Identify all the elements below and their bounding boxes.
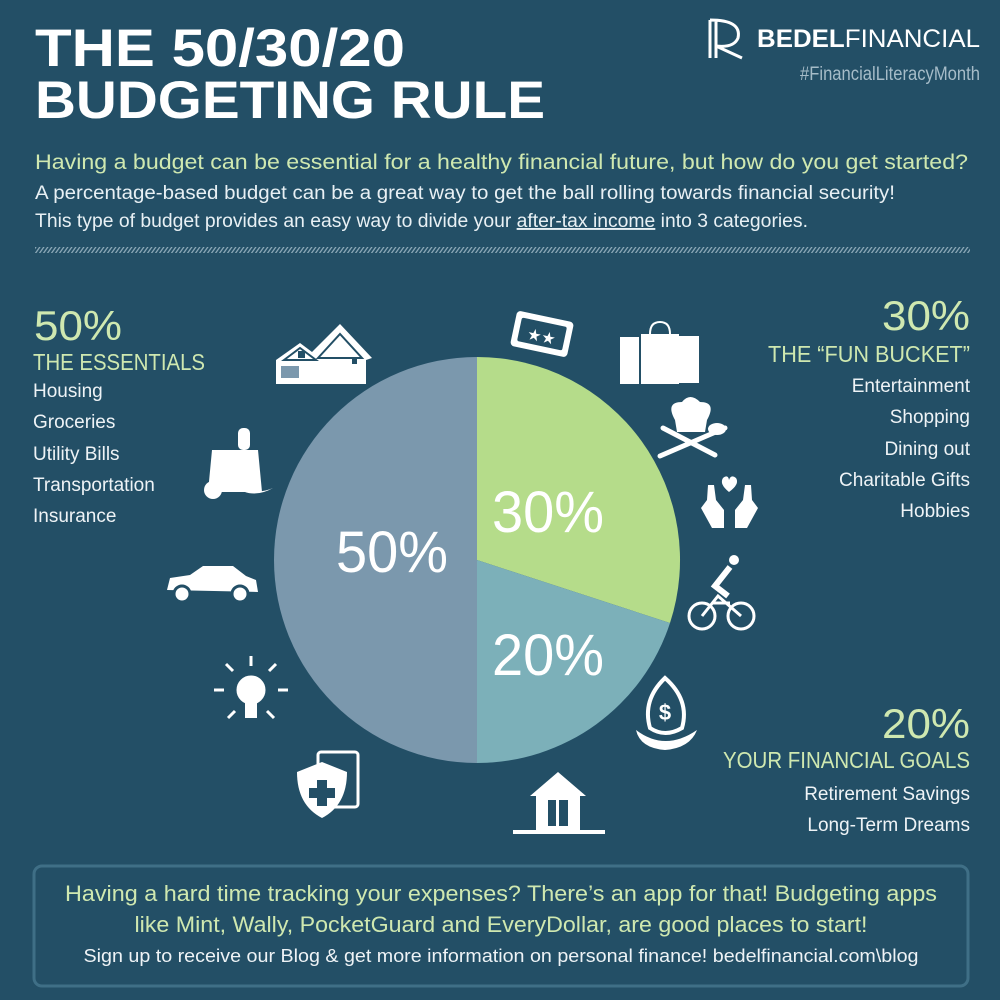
panel: fun bucket: Hobbies [900, 501, 970, 522]
panel: essentials: Utility Bills [33, 444, 120, 465]
panel: essentials [33, 302, 205, 527]
panel: fun bucket: Charitable Gifts [839, 470, 970, 491]
icon: beach house [513, 772, 605, 834]
panel: essentials: Insurance [33, 506, 116, 527]
logo: BEDELFINANCIAL [757, 25, 980, 53]
icon: house [276, 324, 372, 384]
icon: light bulb [214, 656, 288, 718]
panel: essentials: Transportation [33, 475, 155, 496]
icon: chef hat and utensils [660, 397, 726, 456]
icon: bicycle [689, 555, 754, 629]
callout: apps box: like Mint, Wally, PocketGuard and EveryDollar, are good places to start! [134, 912, 868, 937]
panel: fun bucket [768, 292, 971, 522]
panel: fun bucket: Shopping [890, 407, 970, 428]
title: THE 50/30/20 [35, 19, 405, 78]
icon: groceries [204, 428, 273, 499]
panel: essentials: 50% [34, 302, 122, 349]
panel: financial goals [723, 700, 970, 836]
panel: fun bucket: Dining out [884, 439, 971, 460]
panel: financial goals: Long-Term Dreams [807, 815, 970, 836]
intro text: This type of budget provides an easy way to divide your after-tax income into 3 categories. [35, 211, 808, 232]
icon: ticket [510, 310, 574, 358]
callout: apps box: Sign up to receive our Blog & get more information on personal finance! bedelfinancial.com\blog [84, 946, 918, 966]
logo: #FinancialLiteracyMonth [800, 64, 980, 85]
icon: charitable hands [701, 476, 758, 528]
icon: money nest egg [636, 678, 697, 750]
panel: financial goals: Retirement Savings [804, 784, 970, 805]
pie chart: 30% [492, 480, 604, 545]
panel: financial goals: YOUR FINANCIAL GOALS [723, 747, 970, 773]
pie chart: 20% [492, 623, 604, 688]
panel: essentials: Housing [33, 381, 103, 402]
icon: shopping bags [620, 322, 699, 385]
icon: car [167, 566, 258, 602]
intro text: A percentage-based budget can be a great way to get the ball rolling towards financial security! [35, 183, 895, 204]
icon: insurance shield [297, 752, 358, 818]
panel: essentials: Groceries [33, 412, 115, 433]
logo [710, 20, 980, 85]
callout: apps box [34, 866, 968, 986]
pie chart [274, 357, 680, 763]
icon: ticket: ★★ [525, 326, 557, 349]
intro text [35, 183, 895, 232]
panel: fun bucket: THE “FUN BUCKET” [768, 341, 970, 367]
title [35, 19, 545, 130]
subtitle: Having a budget can be essential for a healthy financial future, but how do you get started? [35, 151, 968, 174]
title: BUDGETING RULE [35, 71, 545, 130]
panel: financial goals: 20% [882, 700, 970, 747]
callout: apps box: Having a hard time tracking your expenses? There’s an app for that! Budgeting apps [65, 881, 937, 906]
icon: money nest egg: $ [659, 700, 671, 725]
panel: essentials: THE ESSENTIALS [33, 349, 205, 375]
panel: fun bucket: 30% [882, 292, 970, 339]
pie chart: 50% [336, 520, 448, 585]
panel: fun bucket: Entertainment [852, 376, 971, 397]
